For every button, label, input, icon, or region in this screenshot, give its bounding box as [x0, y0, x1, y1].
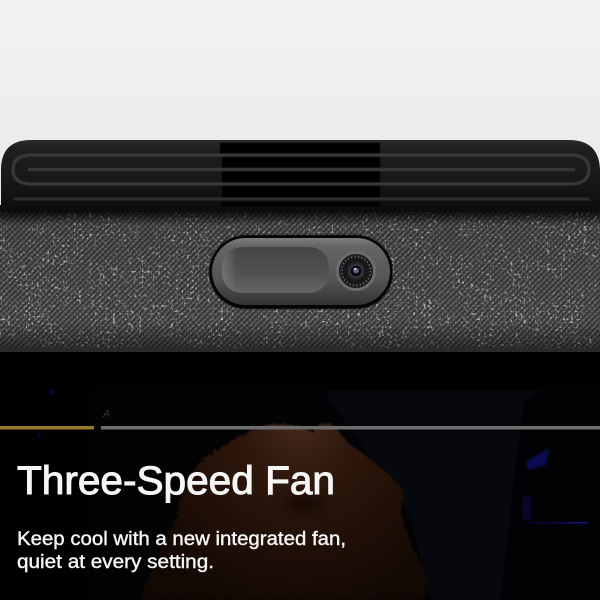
camera capsule: [209, 235, 393, 309]
video scrubber track: [0, 426, 600, 430]
privacy slider: [222, 247, 329, 293]
title: Three-Speed Fan: [17, 459, 335, 503]
panel: fabric camera bar: [0, 205, 600, 350]
panel: screen content: [0, 352, 600, 600]
blue horizontal streak: [505, 522, 588, 524]
dark vent centre: [220, 143, 380, 207]
screen top bezel: [0, 348, 600, 352]
fan vent unit: [1, 140, 600, 212]
scrubber glyph: A: [102, 408, 110, 420]
vent grooves: [13, 155, 590, 199]
body text: quiet at every setting.: [17, 551, 214, 573]
hair silhouette: [140, 423, 427, 600]
background wall: [0, 0, 600, 210]
body text: Keep cool with a new integrated fan,: [17, 528, 346, 550]
blue light streaks: [38, 390, 549, 520]
icon: camera lens: [336, 251, 376, 291]
body text: [17, 528, 346, 573]
hair dark fold: [285, 495, 325, 511]
